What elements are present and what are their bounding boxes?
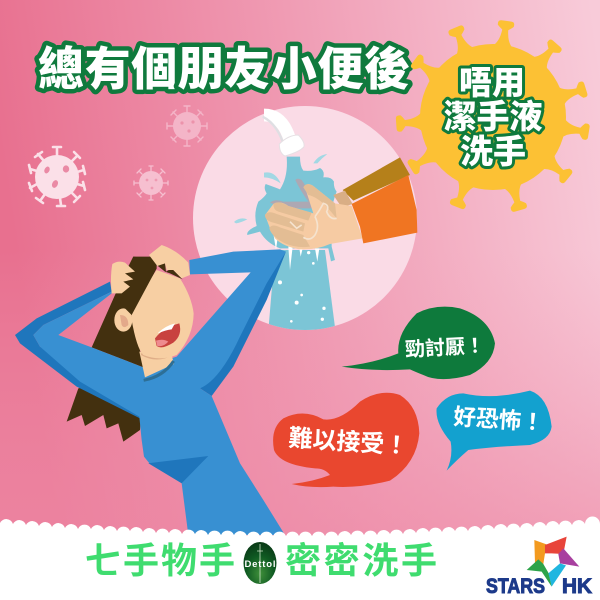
neck shadow xyxy=(141,352,177,359)
badge text: 洗手 xyxy=(460,133,526,170)
white scalloped footer xyxy=(0,516,600,600)
icon: yellow virus badge xyxy=(395,19,591,213)
blue body xyxy=(33,249,286,535)
icon: large pale virus xyxy=(29,147,85,206)
wordmark: STARS xyxy=(486,575,545,598)
orange sleeve xyxy=(352,175,417,243)
star mark xyxy=(527,537,579,587)
fingers xyxy=(265,184,337,247)
faucet xyxy=(264,115,290,140)
drips and bubbles xyxy=(273,233,319,270)
hair back xyxy=(92,257,157,367)
logo: STARS HK xyxy=(486,537,592,598)
bubble: green xyxy=(342,307,495,379)
footer slogan right: 密密洗手 xyxy=(285,540,437,581)
waist shadow xyxy=(148,456,208,483)
icon: Dettol logo xyxy=(244,542,276,584)
collar xyxy=(144,361,174,380)
hands and tap xyxy=(234,115,417,323)
hair lower xyxy=(67,383,142,442)
footer slogan left: 七手物手 xyxy=(85,540,235,581)
grey shadow xyxy=(270,179,315,208)
front hand palm xyxy=(265,184,363,249)
badge text xyxy=(444,64,542,170)
left arm dark xyxy=(15,282,143,418)
mouth xyxy=(155,323,180,347)
badge text: 潔手液 xyxy=(444,98,542,135)
icon: small faded virus xyxy=(134,166,168,200)
title: 總有個朋友小便後 xyxy=(38,43,410,95)
character: frustrated woman xyxy=(15,245,286,535)
left hand xyxy=(111,262,135,293)
water stream xyxy=(268,250,336,335)
face xyxy=(132,270,194,358)
logo: STARS HK: HK xyxy=(562,575,592,598)
soap suds xyxy=(290,203,337,239)
back hand xyxy=(333,191,353,207)
bubble text: red: 難以接受！ xyxy=(288,425,409,460)
bubble text: blue: 好恐怖！ xyxy=(453,403,545,436)
panel: hand washing circle xyxy=(193,106,417,335)
badge text: 唔用 xyxy=(459,64,525,101)
back sleeve xyxy=(343,157,410,201)
right arm dark xyxy=(200,252,286,396)
neck xyxy=(139,352,174,377)
fringe hair xyxy=(120,257,183,315)
water droplets xyxy=(234,154,327,223)
bubble: blue xyxy=(436,391,552,471)
icon: medium faded virus xyxy=(167,106,207,146)
bubble text: green: 勁討厭！ xyxy=(404,333,485,361)
icon: Dettol logo: Dettol xyxy=(244,559,276,570)
right hand xyxy=(149,245,190,278)
water splash xyxy=(247,157,337,261)
ear xyxy=(114,308,132,332)
bubble: red xyxy=(273,393,419,487)
